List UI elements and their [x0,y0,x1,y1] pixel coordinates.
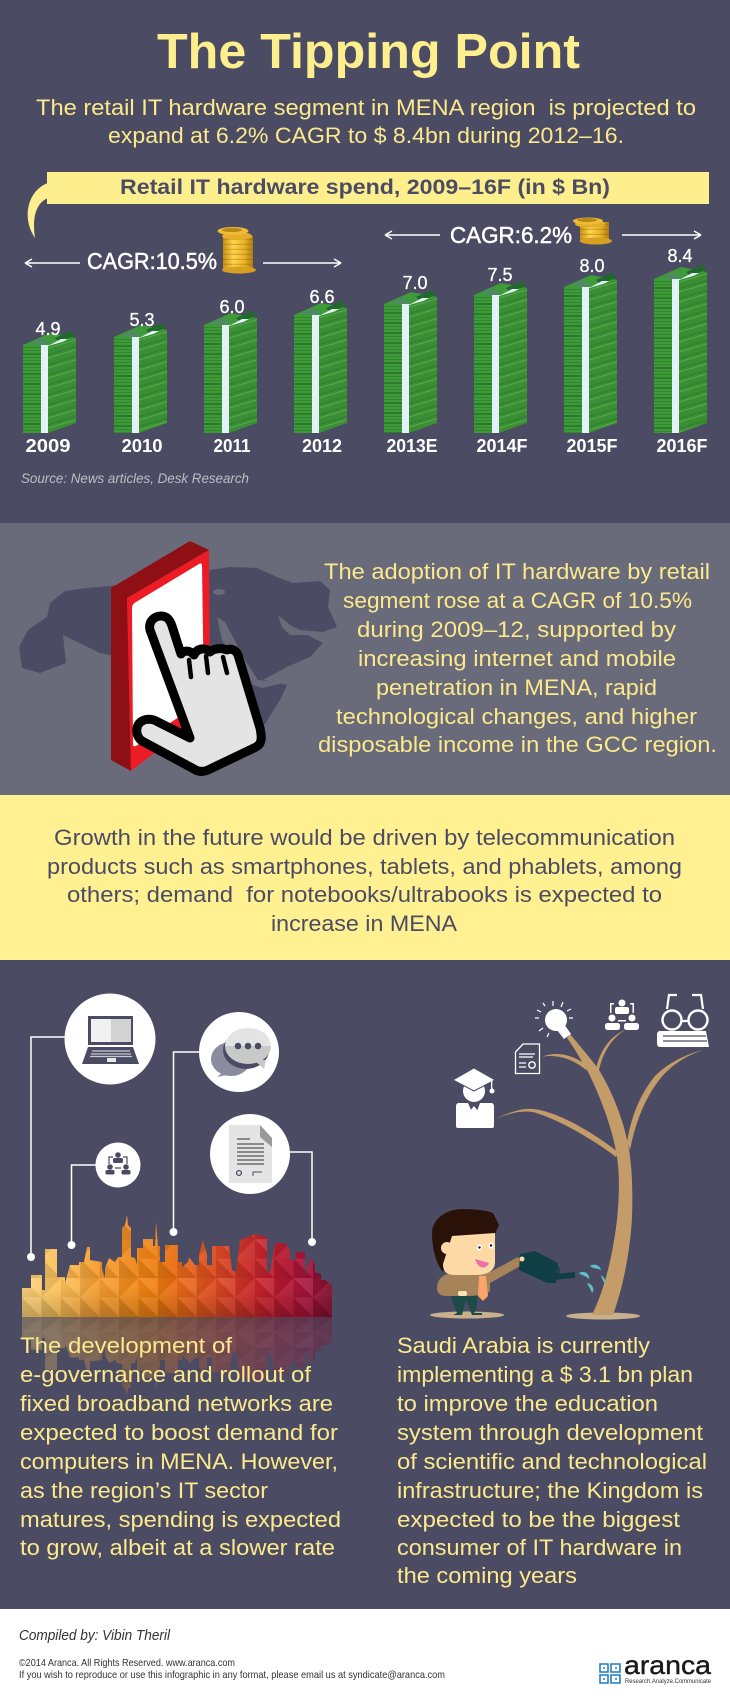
right text: system through development [397,1420,704,1445]
icon: light bulb [535,1001,573,1039]
aranca logo [600,1650,712,1685]
panel text [318,559,717,757]
CAGR 10.5% annotation [25,227,341,274]
bar value labels [36,246,692,339]
skyline reflection [22,1317,332,1397]
aranca logo: aranca [624,1650,712,1680]
illustration: tree [495,1030,703,1320]
right text: to improve the education [397,1391,658,1416]
city skyline [22,1215,332,1317]
subtitle [36,95,696,148]
bar value labels: 7.0 [402,273,428,293]
bar value labels: 8.4 [668,246,692,266]
icon: people network white [605,1000,639,1030]
left text: to grow, albeit at a slower rate [20,1535,335,1560]
bar 2009 [23,331,76,433]
growth text: increase in MENA [271,911,457,936]
bar 2016F [654,265,707,433]
subtitle: The retail IT hardware segment in MENA region is projected to [36,95,696,120]
year axis labels: 2010 [122,436,162,456]
bar value labels: 5.3 [130,310,154,330]
icon: graduate [453,1068,495,1128]
year axis labels: 2014F [476,436,528,456]
year axis labels: 2015F [566,436,618,456]
copyright note: ©2014 Aranca. All Rights Reserved. www.aranca.com [19,1657,235,1669]
panel: adoption of IT hardware [0,523,730,795]
bar value labels: 6.6 [310,287,334,307]
CAGR 6.2% annotation [385,218,701,248]
subtitle: expand at 6.2% CAGR to $ 8.4bn during 2012–16. [108,123,624,148]
right text [397,1333,707,1588]
icon: document [210,1114,290,1194]
footer [0,1609,730,1699]
right text: implementing a $ 3.1 bn plan [397,1362,693,1387]
left text: The development of [20,1333,233,1358]
left text: e-governance and rollout of [20,1362,312,1387]
bar 2015F [564,273,617,433]
left text: computers in MENA. However, [20,1449,338,1474]
panel text: increasing internet and mobile [358,646,676,671]
CAGR 6.2% annotation: CAGR:6.2% [450,222,572,248]
panel text: disposable income in the GCC region. [318,732,717,757]
year axis labels: 2016F [656,436,708,456]
icon: laptop [64,994,156,1084]
growth text [47,825,682,936]
icon: glasses on book [657,995,709,1047]
bar 2010 [114,323,167,433]
bar 2011 [204,311,257,433]
year axis labels: 2009 [26,436,70,456]
panel: e-governance and broadband [20,994,341,1560]
panel: future growth [0,795,730,960]
illustration: man watering the tree [430,1209,605,1318]
bar value labels: 8.0 [580,256,604,276]
icon: chat bubbles [199,1012,279,1092]
bar 2014F [474,281,527,433]
right text: consumer of IT hardware in [397,1535,682,1560]
panel text: penetration in MENA, rapid [376,675,657,700]
year axis labels: 2012 [302,436,342,456]
icon: certificate [516,1044,540,1074]
bar value labels: 4.9 [36,319,60,339]
panel: Saudi Arabia education plan [397,995,709,1588]
right text: the coming years [397,1563,577,1588]
icon: phone [111,541,210,771]
year axis labels: 2011 [214,436,250,456]
right text: of scientific and technological [397,1449,707,1474]
year axis labels [26,436,708,456]
connector lines and dots [27,1037,316,1261]
growth text: products such as smartphones, tablets, and phablets, among [47,854,682,879]
aranca logo: Research.Analyze.Communicate [625,1678,711,1685]
source note: Source: News articles, Desk Research [21,470,249,486]
header [36,25,696,148]
icon: people network [96,1142,140,1188]
year axis labels: 2013E [386,436,438,456]
panel text: during 2009–12, supported by [357,617,677,642]
growth text: others; demand for notebooks/ultrabooks is expected to [67,882,662,907]
bar value labels: 6.0 [220,297,244,317]
growth text: Growth in the future would be driven by telecommunication [54,825,675,850]
CAGR 10.5% annotation: CAGR:10.5% [87,248,217,274]
left text: matures, spending is expected [20,1507,341,1532]
bar value labels: 7.5 [488,265,512,285]
copyright note: If you wish to reproduce or use this infographic in any format, please email us at syndicate@aranca.com [19,1669,445,1681]
right text: Saudi Arabia is currently [397,1333,651,1358]
right text: infrastructure; the Kingdom is [397,1478,703,1503]
panel: bar chart of retail IT hardware spend [21,172,709,486]
left text [20,1333,341,1560]
map of MENA [19,567,337,740]
panel text: The adoption of IT hardware by retail [324,559,710,584]
left text: as the region’s IT sector [20,1478,269,1503]
compiled by: Compiled by: Vibin Theril [19,1628,171,1644]
left text: fixed broadband networks are [20,1391,333,1416]
icon: pointing hand [137,616,261,771]
panel text: technological changes, and higher [336,704,698,729]
chart heading band: Retail IT hardware spend, 2009–16F (in $ Bn) [120,176,610,199]
chart heading band [28,172,709,238]
left text: expected to boost demand for [20,1420,339,1445]
right text: expected to be the biggest [397,1507,681,1532]
bar 2012 [294,301,347,433]
bar 2013E [384,290,437,433]
panel text: segment rose at a CAGR of 10.5% [343,588,692,613]
copyright note [19,1657,445,1681]
title: The Tipping Point [157,25,580,79]
